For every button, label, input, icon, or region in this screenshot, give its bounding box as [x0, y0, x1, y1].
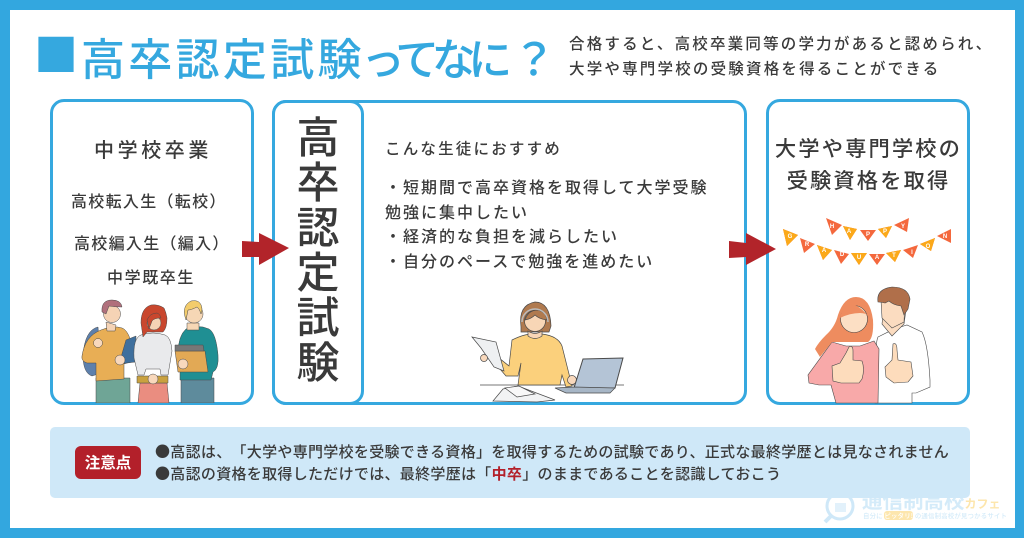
title: ？ [512, 24, 556, 88]
panel heading: 受験資格を取得 [787, 164, 950, 195]
icon: graduation bunting: A [847, 229, 852, 235]
icon: graduation bunting: A [875, 255, 880, 261]
panel: recommended students [272, 100, 747, 405]
icon: woman working on laptop [471, 302, 624, 402]
icon: graduation bunting: R [805, 242, 810, 248]
subtitle text [569, 32, 993, 79]
logo tagline: 自分に ピッタリ! の通信制高校が見つかるサイト [863, 511, 1007, 520]
student middle [134, 305, 172, 403]
icon: three students [82, 300, 218, 403]
icon: graduation bunting [783, 218, 951, 265]
icon: graduation bunting: A [822, 248, 827, 254]
caution badge: 注意点 [85, 451, 131, 473]
icon: couple giving thumbs up [808, 286, 930, 404]
panel: junior high graduates [50, 99, 254, 405]
caution text: ●高認の資格を取得しただけでは、最終学歴は「中卒」のままであることを認識しておこう [155, 462, 781, 484]
vertical heading: 試 [296, 284, 340, 346]
vertical heading [296, 104, 340, 391]
vertical heading: 験 [296, 329, 340, 391]
icon: graduation bunting: P [866, 232, 870, 238]
icon: graduation bunting: I [911, 250, 913, 256]
subtitle text: 大学や専門学校の受験資格を得ることができる [569, 57, 940, 79]
arrow: left to centre [242, 233, 289, 265]
icon: graduation bunting: Y [901, 224, 905, 230]
panel heading [775, 132, 962, 195]
panel: qualification obtained [766, 99, 970, 405]
arrow: centre to right [729, 233, 776, 265]
student right [175, 301, 218, 403]
icon: graduation bunting: G [788, 234, 793, 240]
icon: graduation bunting: H [830, 224, 834, 230]
vertical heading: 定 [296, 239, 340, 301]
woman [808, 297, 879, 403]
subtitle text: 合格すると、高校卒業同等の学力があると認められ、 [569, 32, 993, 54]
icon: graduation bunting: P [883, 229, 887, 235]
vertical label panel [272, 100, 364, 405]
list of eligible students: 中学既卒生 [107, 264, 195, 288]
recommendation list [385, 174, 709, 272]
icon: graduation bunting: O [926, 244, 931, 250]
icon: graduation bunting: T [892, 253, 896, 259]
recommendation list: ・短期間で高卒資格を取得して大学受験 [385, 174, 709, 198]
vertical heading: 卒 [296, 149, 340, 211]
recommendation list: ・経済的な負担を減らしたい [385, 223, 619, 247]
icon: graduation bunting: U [857, 255, 861, 261]
recommendation list: 勉強に集中したい [385, 199, 529, 223]
title: ってなに [361, 24, 505, 88]
note panel [50, 427, 970, 498]
recommendation list: ・自分のペースで勉強を進めたい [385, 248, 654, 272]
panel heading: 大学や専門学校の [775, 132, 962, 163]
panel intro heading: こんな生徒におすすめ [385, 137, 562, 159]
vertical heading: 高 [296, 104, 340, 166]
list of eligible students: 高校編入生（編入） [74, 230, 230, 254]
caution text: ●高認は、「大学や専門学校を受験できる資格」を取得するための試験であり、正式な最終学歴とは見なされません [155, 441, 949, 462]
caution text [155, 441, 949, 484]
watermark logo [824, 490, 1007, 524]
caution badge [75, 446, 141, 479]
title: 高卒認定試験 [81, 24, 365, 88]
title: ■ [34, 20, 78, 84]
list of eligible students: 高校転入生（転校） [71, 188, 227, 212]
man [875, 287, 930, 403]
student left [82, 300, 136, 403]
icon: graduation bunting: D [840, 252, 845, 258]
list of eligible students [71, 188, 230, 288]
logo icon [824, 498, 854, 524]
vertical heading: 認 [296, 194, 340, 256]
title [34, 20, 556, 88]
panel heading: 中学校卒業 [94, 134, 212, 163]
icon: graduation bunting: N [943, 234, 947, 240]
